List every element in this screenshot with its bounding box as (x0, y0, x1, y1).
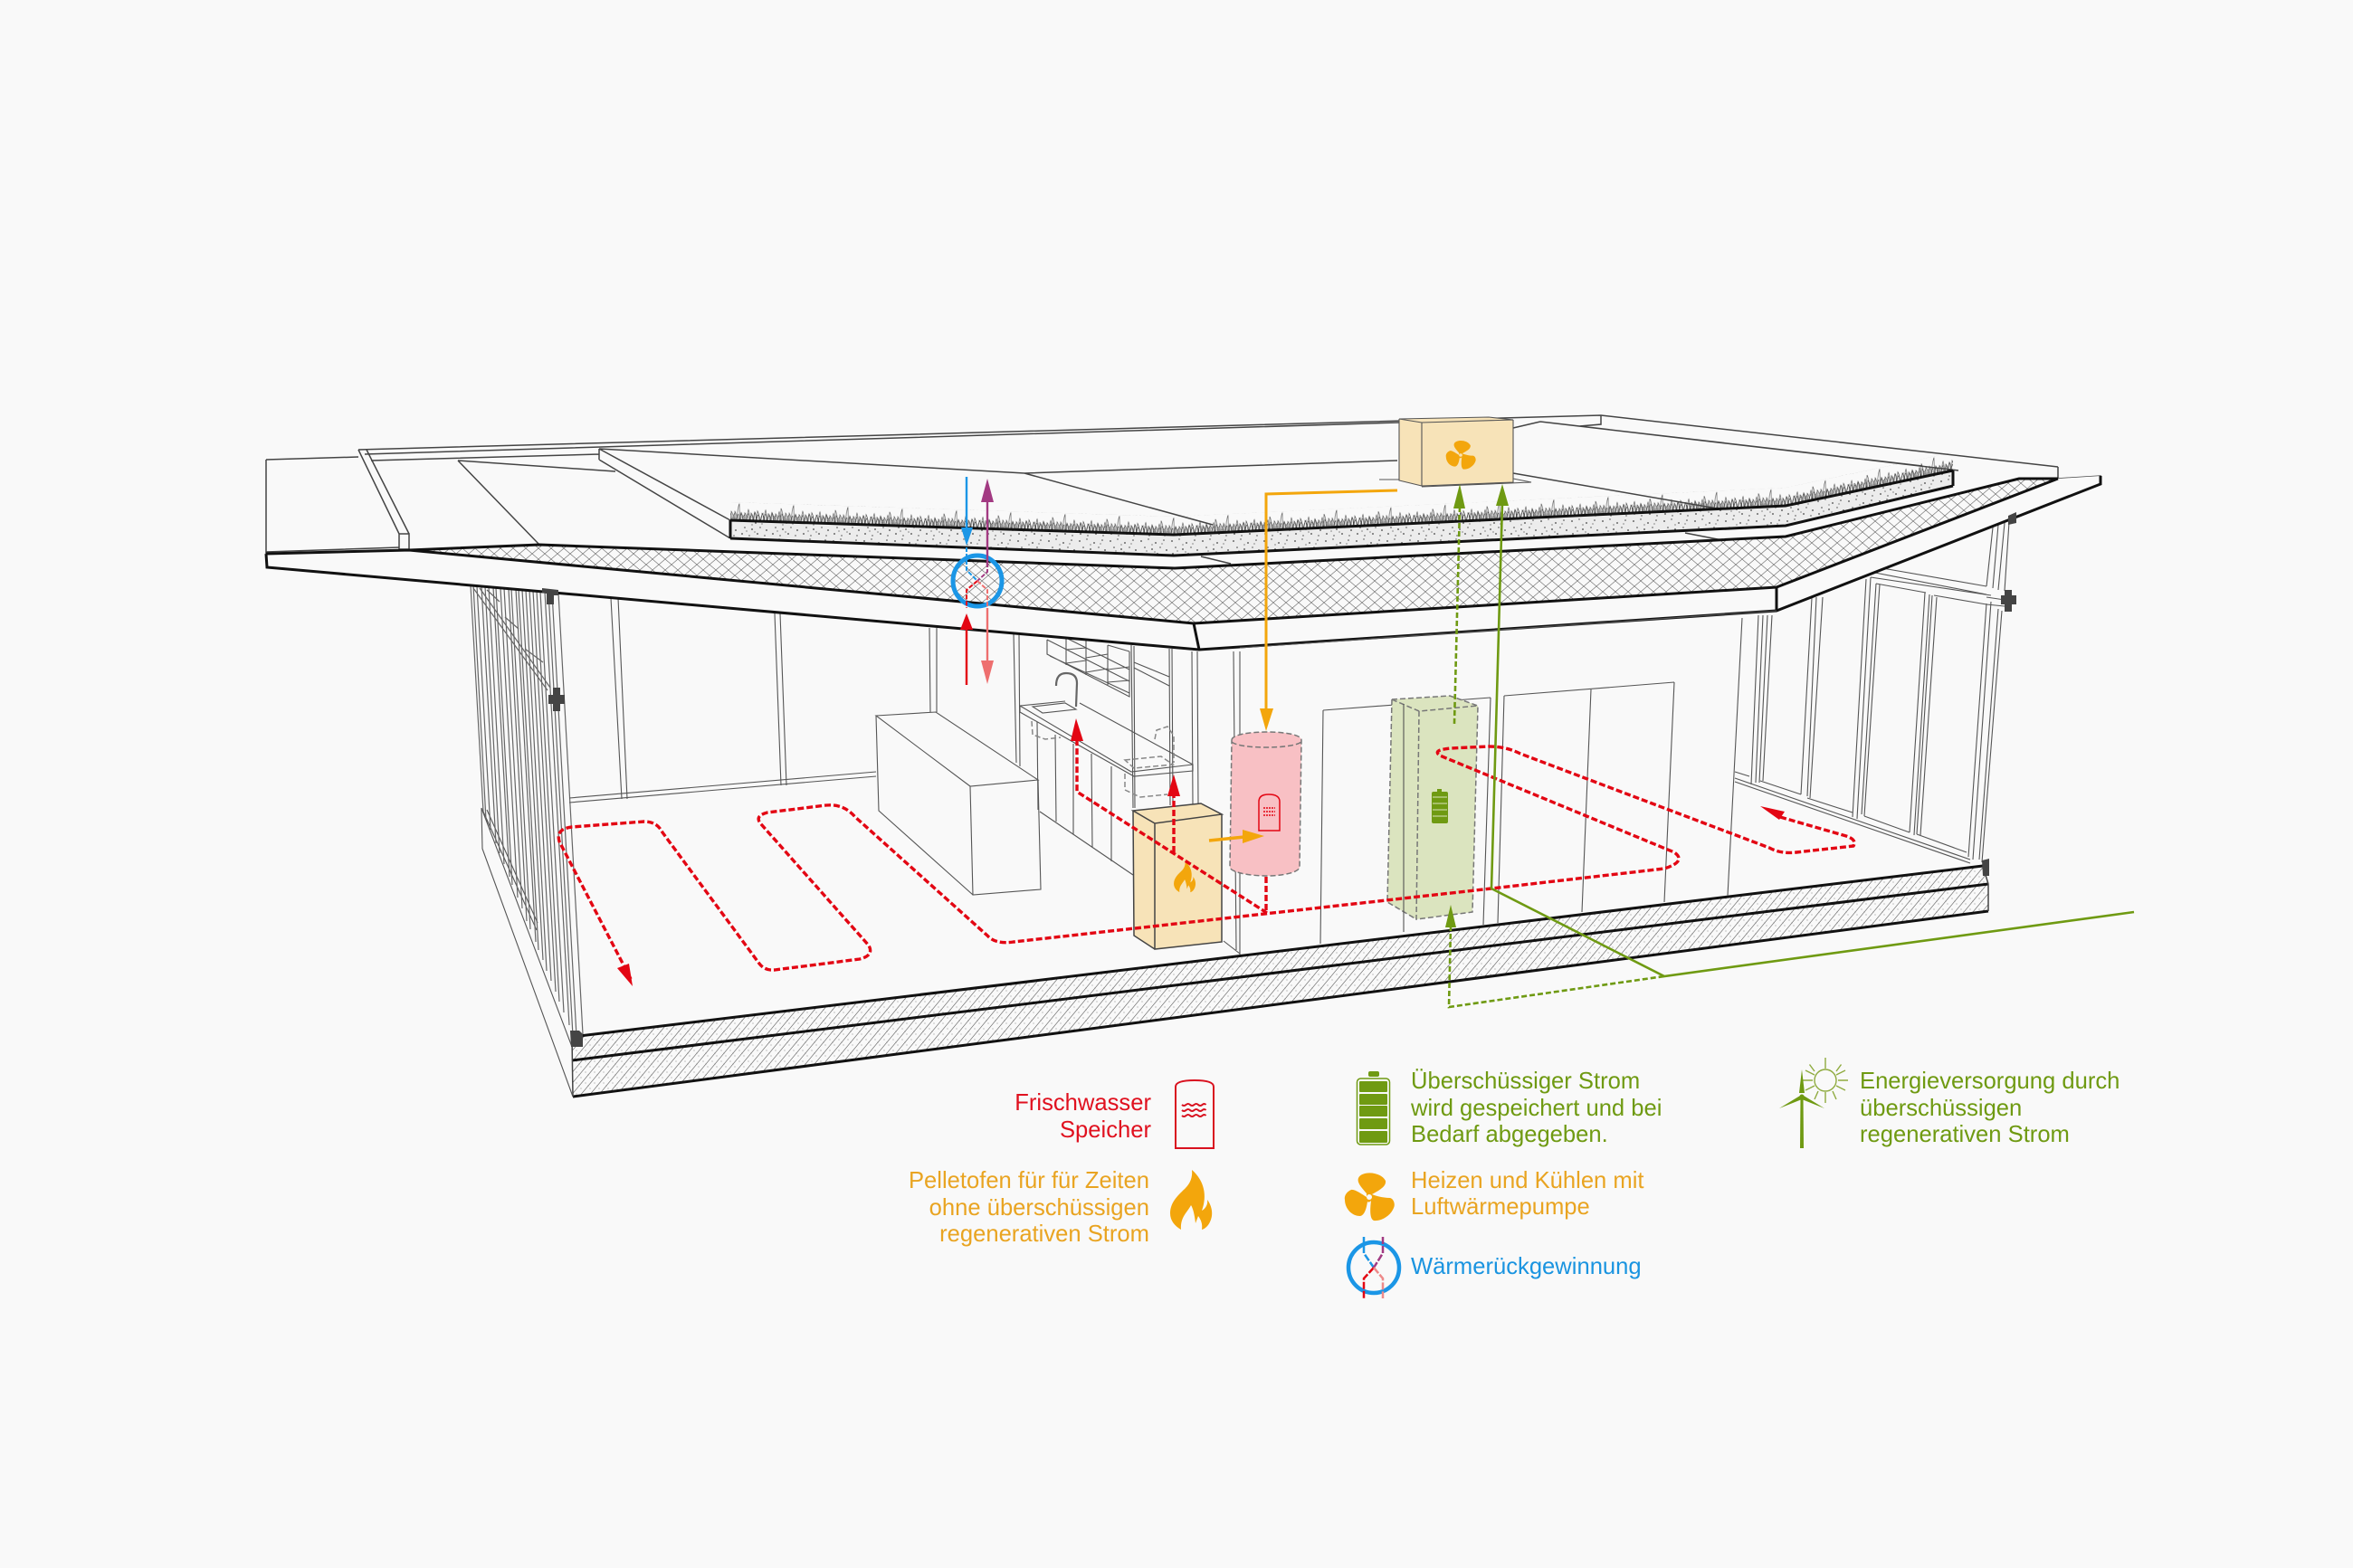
icon: sun (1803, 1058, 1848, 1103)
orange line from heat pump to tank (1209, 490, 1397, 843)
legend: Frischwasser Speicher: Frischwasser (1015, 1090, 1151, 1116)
arrow: floor heating start (617, 964, 633, 986)
legend: renewable supply (1779, 1058, 2120, 1148)
legend: Pelletofen: regenerativen Strom (939, 1221, 1149, 1247)
arrow: floor heating end (1760, 806, 1785, 820)
kitchen counter and shelf (1014, 633, 1240, 955)
icon: wind turbine (1779, 1069, 1824, 1148)
legend: renewable supply: regenerativen Strom (1860, 1122, 2070, 1147)
icon: fan on box (1446, 441, 1476, 470)
icon: flame (1170, 1170, 1212, 1230)
icon: fan (1345, 1173, 1395, 1221)
back wall mullions (569, 598, 937, 803)
legend: battery: Überschüssiger Strom (1411, 1069, 1640, 1094)
roof fascia (266, 476, 2101, 650)
roof structure back lines (266, 415, 2101, 564)
green electricity lines (1445, 484, 2134, 1007)
heat pump box on roof (1379, 417, 1531, 487)
legend: battery: Bedarf abgegeben. (1411, 1122, 1608, 1147)
legend: renewable supply: Energieversorgung durch (1860, 1069, 2120, 1094)
pellet stove (1133, 803, 1222, 949)
legend: Pelletofen: Pelletofen für für Zeiten (909, 1168, 1149, 1193)
arrow: tap (1071, 718, 1083, 741)
legend: Pelletofen (909, 1168, 1212, 1247)
heat recovery ventilation (953, 477, 1002, 685)
icon: battery (1358, 1071, 1390, 1145)
insulation hatched band (409, 479, 2058, 623)
icon: heat exchanger (1348, 1237, 1399, 1298)
hot water pipes (1071, 718, 1267, 913)
legend: renewable supply: überschüssigen (1860, 1096, 2022, 1121)
concealed sink and faucet (1032, 721, 1174, 797)
icon: tank in cylinder (1259, 794, 1280, 831)
icon: water tank (1176, 1080, 1214, 1148)
connectors (542, 512, 2016, 1047)
legend: heat recovery: Wärmerückgewinnung (1411, 1254, 1642, 1279)
arrow: sink (1167, 774, 1180, 796)
icon: battery in column (1432, 789, 1448, 823)
legend: heat pump: Heizen und Kühlen mit (1411, 1168, 1644, 1193)
legend: Frischwasser Speicher (1015, 1080, 1214, 1148)
floor slab section (481, 808, 1988, 1097)
legend: heat recovery (1348, 1237, 1642, 1298)
legend: battery (1358, 1069, 1662, 1147)
legend: Frischwasser Speicher: Speicher (1060, 1117, 1151, 1143)
kitchen island (876, 712, 1041, 895)
battery column (1387, 696, 1478, 932)
floor heating pipe (558, 746, 1854, 979)
legend: heat pump: Luftwärmepumpe (1411, 1194, 1590, 1220)
left window wall (471, 585, 583, 1036)
icon: flame on stove (1174, 861, 1196, 892)
green roof gravel and grass (730, 452, 1953, 556)
arrow: stove to tank (1209, 837, 1244, 841)
fresh water cylinder (1230, 732, 1301, 876)
right window wall (1735, 522, 2009, 863)
legend: battery: wird gespeichert und bei (1410, 1096, 1662, 1121)
legend: heat pump (1345, 1168, 1644, 1221)
legend: Pelletofen: ohne überschüssigen (929, 1195, 1149, 1221)
right wall panels (1320, 618, 1742, 944)
